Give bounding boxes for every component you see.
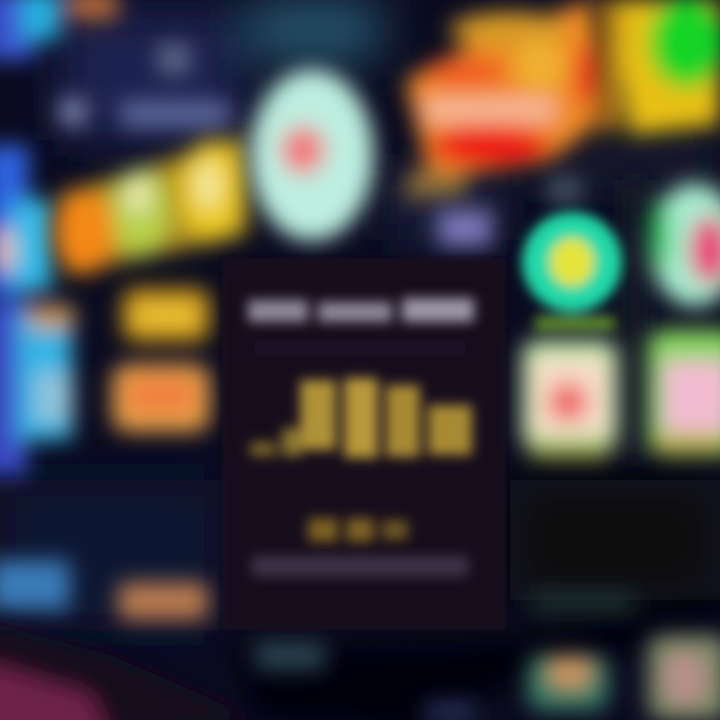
small lights below marquee	[438, 178, 582, 246]
left column lights	[112, 288, 210, 432]
small gold text bar	[308, 518, 408, 542]
left edge neon strip	[0, 145, 74, 475]
right dark pillars	[622, 180, 648, 460]
bottom right lights	[255, 592, 720, 720]
top-left lights	[0, 0, 230, 128]
yellow and green top-right sign	[596, 0, 720, 135]
far right lower panel	[648, 330, 720, 455]
bottom left lights	[0, 560, 208, 620]
orange and red marquee	[405, 0, 615, 198]
mint oval sign	[250, 69, 374, 241]
teal circular light	[522, 212, 622, 330]
far right mint and pink light	[649, 183, 720, 307]
lower right light panel	[522, 340, 618, 458]
panel heading text bar	[248, 298, 474, 322]
gold percentage text bar	[250, 378, 472, 458]
grey caption bar	[252, 556, 468, 576]
central dark panel	[222, 258, 506, 630]
bottom counter	[0, 600, 720, 720]
panel faint subheading	[255, 344, 465, 352]
row of colourful lights	[54, 135, 248, 275]
